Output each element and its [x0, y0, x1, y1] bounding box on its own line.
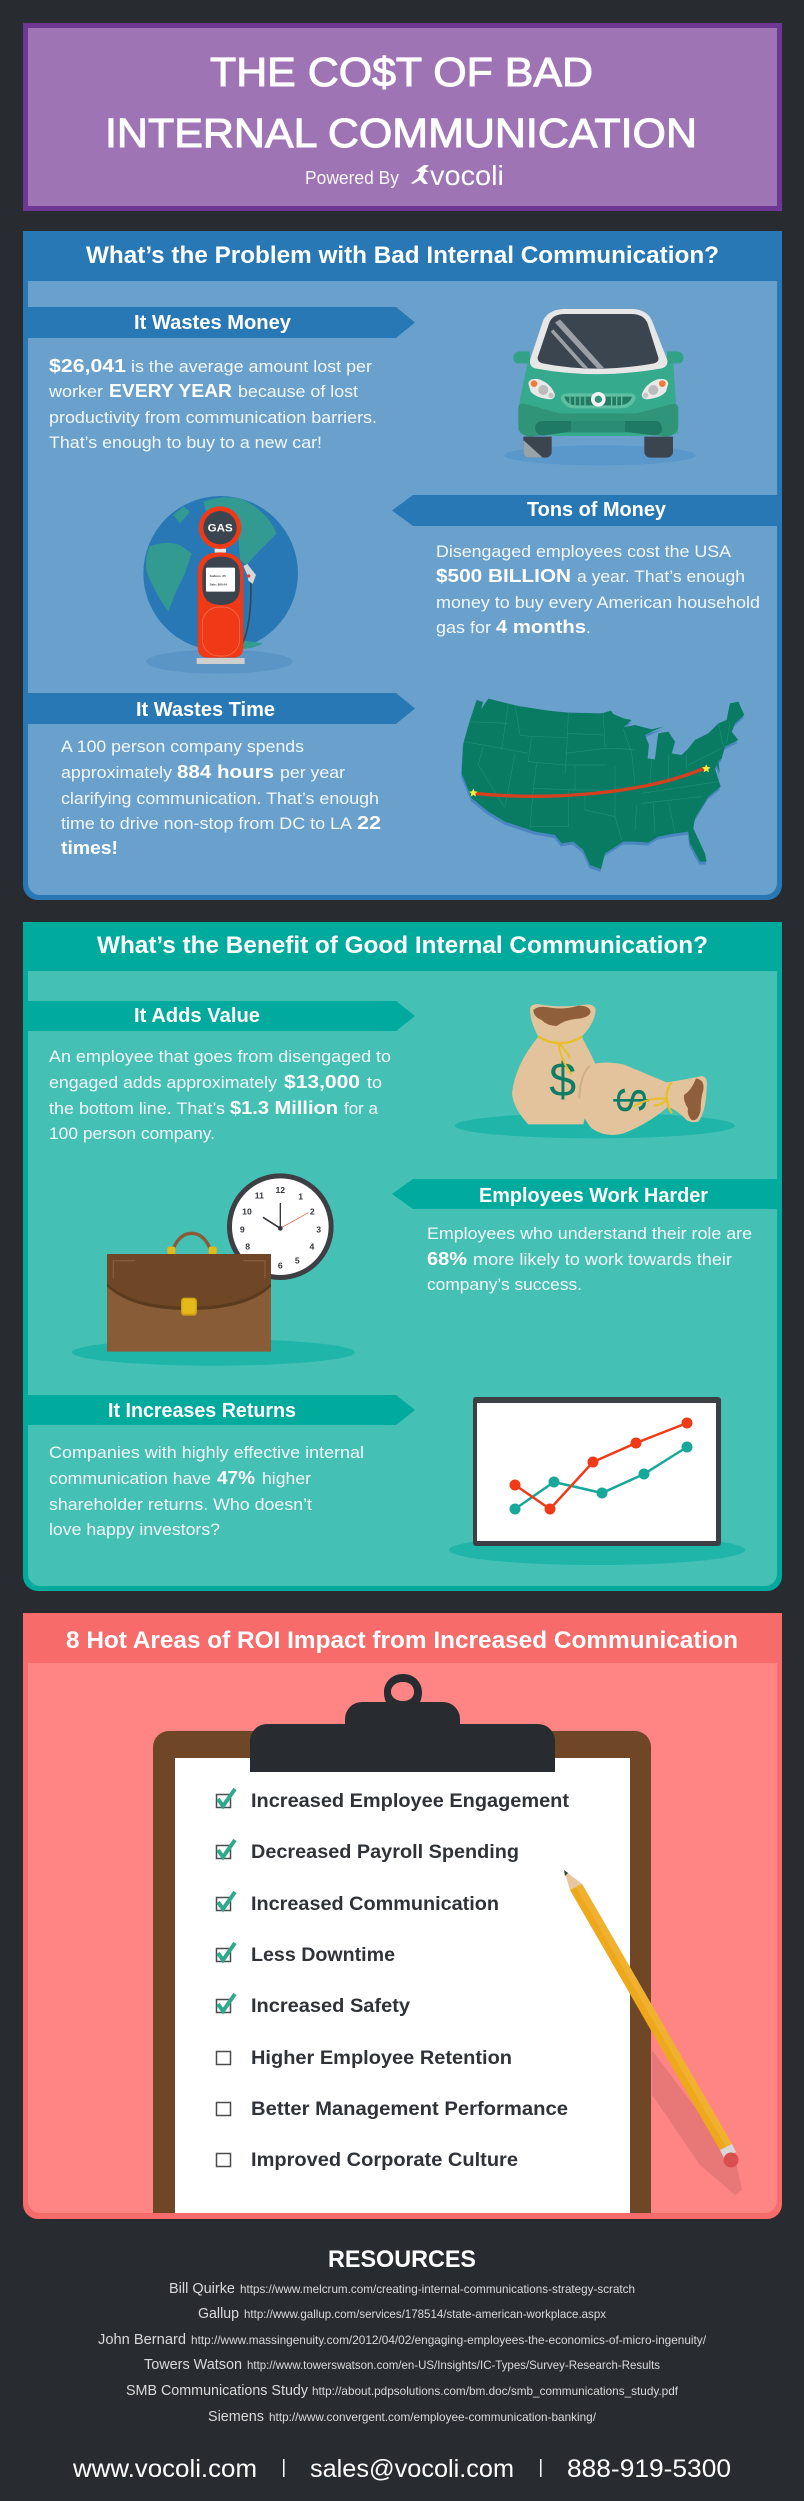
icon: money bags: $: [549, 1053, 576, 1107]
powered by vocoli logo: [305, 160, 504, 191]
icon: money bags: $: [606, 1088, 654, 1112]
text: wastes time: time to drive non-stop from DC to LA: [61, 815, 352, 833]
icon: clock: 1: [298, 1192, 303, 1202]
text: tons of money: money to buy every American household: [436, 594, 760, 612]
text: wastes time: [61, 738, 381, 858]
text: increases returns: Companies with highly effective internal: [49, 1444, 364, 1462]
source: smb communications study: http://about.pdpsolutions.com/bm.doc/smb_communications_study.pdf: [312, 2384, 679, 2398]
text: employees work harder: company’s success.: [427, 1276, 582, 1294]
source: bill quirke: Bill Quirke: [169, 2280, 235, 2297]
text: adds value: to: [367, 1074, 382, 1092]
text: increases returns: shareholder returns. Who doesn’t: [49, 1496, 312, 1514]
resources: [98, 2246, 707, 2425]
text: tons of money: Disengaged employees cost the USA: [436, 543, 731, 561]
source: john bernard: [98, 2331, 707, 2348]
text: wastes time: per year: [280, 764, 346, 782]
item: less downtime: Less Downtime: [251, 1945, 395, 1966]
ribbon: it wastes money: It Wastes Money: [134, 312, 292, 334]
text: wastes time: clarifying communication. That’s enough: [61, 790, 379, 808]
ribbon: tons of money: Tons of Money: [527, 499, 667, 521]
item: better management performance: Better Management Performance: [251, 2099, 568, 2120]
icon: clock: 12: [275, 1185, 285, 1195]
text: increases returns: [49, 1444, 364, 1539]
ribbon: it wastes time: It Wastes Time: [136, 699, 275, 721]
icon: globe and gas pump: [143, 496, 298, 674]
icon: clock: 4: [310, 1242, 315, 1252]
heading: RESOURCES: [328, 2246, 476, 2273]
icon: clock: 10: [242, 1206, 252, 1216]
series: teal line: [510, 1442, 692, 1514]
item: higher employee retention: Higher Employee Retention: [251, 2048, 512, 2069]
source: john bernard: http://www.massingenuity.com/2012/04/02/engaging-employees-the-economics-of-micro-ingenuity/: [191, 2333, 707, 2347]
source: siemens: Siemens: [208, 2408, 264, 2425]
ribbon: it adds value: It Adds Value: [134, 1005, 260, 1027]
icon: clock: 9: [240, 1224, 245, 1234]
text: wastes time: times!: [61, 838, 118, 858]
text: wastes money: That’s enough to buy to a new car!: [49, 434, 322, 452]
item: increased communication: Increased Communication: [251, 1894, 499, 1915]
text: employees work harder: [427, 1225, 752, 1294]
panel: 8 hot areas of ROI: [23, 1613, 782, 2219]
text: employees work harder: 68%: [427, 1249, 467, 1269]
text: adds value: $1.3 Million: [230, 1098, 338, 1118]
source: siemens: http://www.convergent.com/employee-communication-banking/: [269, 2410, 597, 2424]
text: adds value: for a: [344, 1100, 379, 1118]
icon: clock: 11: [255, 1190, 264, 1200]
source: bill quirke: https://www.melcrum.com/creating-internal-communications-strategy-scratch: [240, 2282, 635, 2296]
panel: problem with bad communication: [23, 231, 782, 900]
icon: clock: 5: [295, 1255, 300, 1265]
source: gallup: Gallup: [198, 2305, 239, 2322]
chart: line chart on screen: [449, 1397, 745, 1565]
title: [105, 49, 697, 156]
item: increased safety: Increased Safety: [251, 1996, 410, 2017]
text: increases returns: love happy investors?: [49, 1521, 220, 1539]
text: adds value: the bottom line. That’s: [49, 1100, 225, 1118]
text: adds value: $13,000: [284, 1072, 360, 1092]
text: tons of money: $500 BILLION: [436, 566, 571, 586]
icon: clock: 6: [278, 1261, 283, 1271]
source: siemens: [208, 2408, 597, 2425]
text: wastes money: because of lost: [238, 383, 358, 401]
powered by vocoli logo: Powered By: [305, 168, 399, 188]
text: tons of money: .: [586, 619, 591, 637]
title: THE CO$T OF BAD: [210, 49, 593, 95]
icon: globe and gas pump: Sale: $60.44: [210, 583, 227, 587]
icon: clock and briefcase: [72, 1173, 355, 1366]
icon: globe and gas pump: GAS: [208, 523, 233, 535]
text: tons of money: 4 months: [496, 617, 586, 637]
text: tons of money: a year. That’s enough: [577, 568, 745, 586]
icon: usa map with route: [461, 699, 744, 872]
icon: briefcase: [107, 1233, 271, 1352]
text: increases returns: 47%: [217, 1468, 255, 1488]
text: wastes money: productivity from communication barriers.: [49, 409, 377, 427]
ribbon: it adds value: [28, 1001, 415, 1031]
powered by vocoli logo: vocoli: [430, 160, 504, 191]
footer contact line: sales@vocoli.com: [310, 2455, 514, 2483]
text: increases returns: communication have: [49, 1470, 211, 1488]
icon: clock: 8: [245, 1242, 250, 1252]
source: gallup: http://www.gallup.com/services/178514/state-american-workplace.aspx: [244, 2307, 606, 2321]
icon: pencil: [564, 1870, 742, 2195]
heading: What’s the Benefit of Good Internal Communication?: [97, 932, 708, 959]
text: wastes time: 884 hours: [177, 762, 274, 782]
text: wastes money: $26,041: [49, 356, 126, 376]
icon: clock: 2: [310, 1206, 315, 1216]
item: improved corporate culture: Improved Corporate Culture: [251, 2150, 518, 2171]
icon: clock: 3: [316, 1224, 321, 1234]
ribbon: it increases returns: [28, 1395, 415, 1425]
text: wastes money: EVERY YEAR: [109, 381, 232, 401]
ribbon: it wastes money: [28, 307, 415, 338]
item: decreased payroll spending: Decreased Payroll Spending: [251, 1842, 519, 1863]
source: smb communications study: [126, 2382, 679, 2399]
panel: benefit of good communication: [23, 922, 782, 1591]
text: wastes time: A 100 person company spends: [61, 738, 304, 756]
icon: money bags: [455, 1004, 735, 1138]
footer contact line: [72, 2455, 731, 2483]
ribbon: it wastes time: [28, 693, 415, 724]
text: adds value: An employee that goes from disengaged to: [49, 1048, 391, 1066]
heading: 8 Hot Areas of ROI Impact from Increased Communication: [66, 1627, 738, 1654]
title: INTERNAL COMMUNICATION: [105, 110, 697, 156]
ribbon: employees work harder: Employees Work Harder: [479, 1185, 708, 1207]
text: adds value: [49, 1048, 391, 1143]
text: employees work harder: Employees who understand their role are: [427, 1225, 752, 1243]
title banner: [23, 23, 782, 211]
footer contact line: www.vocoli.com: [72, 2455, 257, 2483]
text: adds value: 100 person company.: [49, 1125, 215, 1143]
source: towers watson: [144, 2356, 660, 2373]
heading: What’s the Problem with Bad Internal Communication?: [86, 242, 719, 269]
text: tons of money: gas for: [436, 619, 492, 637]
ribbon: it increases returns: It Increases Returns: [108, 1400, 296, 1422]
text: employees work harder: more likely to work towards their: [473, 1251, 733, 1269]
text: wastes money: [48, 356, 377, 452]
series: red line: [510, 1418, 692, 1514]
source: towers watson: Towers Watson: [144, 2356, 242, 2373]
text: tons of money: [436, 543, 760, 637]
text: wastes money: worker: [48, 383, 104, 401]
source: smb communications study: SMB Communications Study: [126, 2382, 308, 2399]
footer contact line: 888-919-5300: [567, 2455, 731, 2483]
ribbon: employees work harder: [392, 1179, 777, 1209]
icon: clipboard: [153, 1674, 651, 2213]
icon: globe and gas pump: Gallons: 25: [210, 574, 226, 578]
source: john bernard: John Bernard: [98, 2331, 186, 2348]
text: adds value: engaged adds approximately: [49, 1074, 278, 1092]
checklist: [216, 1789, 570, 2171]
text: increases returns: higher: [262, 1470, 312, 1488]
item: increased employee engagement: Increased Employee Engagement: [251, 1791, 570, 1812]
source: towers watson: http://www.towerswatson.com/en-US/Insights/IC-Types/Survey-Research-Results: [247, 2358, 660, 2372]
icon: car: [504, 309, 696, 465]
ribbon: tons of money: [392, 495, 777, 526]
icon: clock: [227, 1173, 334, 1280]
text: wastes time: approximately: [61, 764, 173, 782]
text: wastes time: 22: [357, 813, 381, 833]
source: bill quirke: [169, 2280, 635, 2297]
text: wastes money: is the average amount lost per: [131, 358, 373, 376]
